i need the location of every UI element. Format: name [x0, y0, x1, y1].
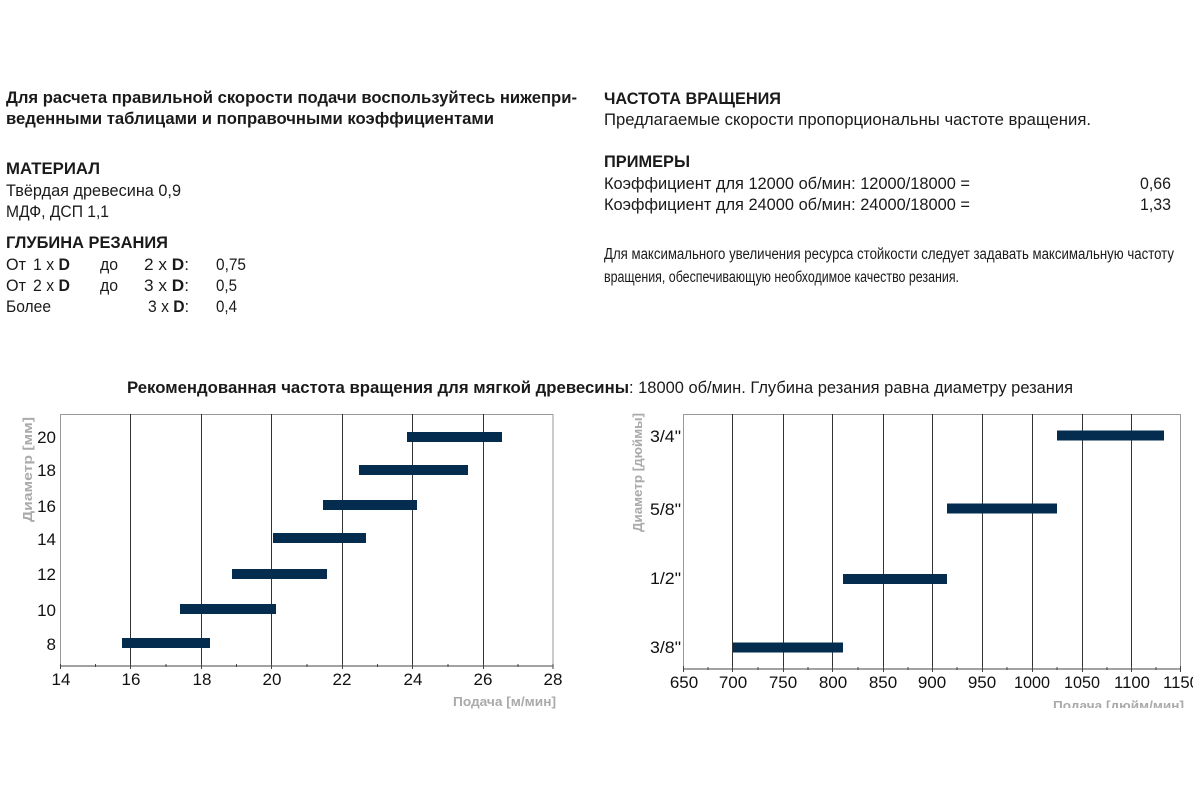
y axis labels: 1/2" [650, 569, 681, 588]
cutting depth table: 1 x D [33, 255, 70, 274]
examples rows: 1,33 [1140, 195, 1171, 214]
cutting depth table: 2 x D [33, 276, 70, 295]
material coefficients: Твёрдая древесина 0,9 [6, 181, 181, 200]
x axis labels: 16 [122, 670, 140, 689]
cutting depth table: 2 x D: [144, 255, 189, 274]
y axis labels: 3/4" [650, 427, 681, 446]
x axis [684, 666, 1180, 672]
x axis labels: 14 [52, 670, 70, 689]
rotation speed text: Предлагаемые скорости пропорциональны частоте вращения. [604, 110, 1091, 129]
cutting depth table: От [6, 255, 26, 274]
panel: examples [604, 152, 1171, 214]
heading: cutting depth: ГЛУБИНА РЕЗАНИЯ [6, 233, 168, 252]
examples rows [604, 174, 1171, 214]
cutting depth table: до [100, 255, 118, 274]
x axis labels: 28 [544, 670, 562, 689]
cutting depth table: От [6, 276, 26, 295]
x axis labels: 22 [333, 670, 351, 689]
y axis labels: 16 [37, 497, 56, 516]
heading: rotation speed: ЧАСТОТА ВРАЩЕНИЯ [604, 89, 781, 108]
bars [733, 430, 1164, 652]
examples rows: Коэффициент для 12000 об/мин: 12000/18000 = [604, 174, 970, 193]
intro text block [6, 88, 577, 128]
y axis labels: 20 [37, 428, 56, 447]
y axis labels: 18 [37, 461, 56, 480]
examples rows: 0,66 [1140, 174, 1171, 193]
x axis labels: 1150 [1163, 673, 1199, 692]
cutting depth table: 0,5 [216, 276, 237, 295]
x axis labels: 950 [968, 673, 996, 692]
x axis labels: 1050 [1064, 673, 1100, 692]
panel: material [6, 159, 181, 221]
heading: examples: ПРИМЕРЫ [604, 152, 690, 171]
charts title: Рекомендованная частота вращения для мягкой древесины [127, 378, 629, 397]
x axis [60, 664, 553, 669]
x axis labels [52, 670, 562, 689]
y axis title: Диаметр [дюймы] [630, 413, 645, 532]
note text [604, 246, 1174, 286]
panel: cutting depth [6, 233, 246, 316]
charts title [127, 378, 1073, 397]
y axis labels: 10 [37, 601, 56, 620]
cutting depth table: Более [6, 297, 51, 316]
intro text block: веденными таблицами и поправочными коэффициентами [6, 109, 494, 128]
x axis labels: 26 [474, 670, 492, 689]
material coefficients: МДФ, ДСП 1,1 [6, 202, 109, 221]
y axis labels [37, 428, 56, 654]
plot frame [684, 414, 1180, 669]
x axis labels: 750 [769, 673, 797, 692]
x axis labels: 1000 [1014, 673, 1050, 692]
y axis labels: 3/8" [650, 638, 681, 657]
y axis labels: 14 [37, 530, 56, 549]
x axis labels: 24 [404, 670, 422, 689]
cutting depth table: 0,4 [216, 297, 237, 316]
x axis labels [670, 676, 1193, 688]
plot frame [60, 414, 553, 666]
y axis title: Диаметр [мм] [20, 417, 35, 522]
x axis labels: 700 [719, 673, 747, 692]
x axis labels: 850 [869, 673, 897, 692]
examples rows: Коэффициент для 24000 об/мин: 24000/18000 = [604, 195, 970, 214]
cutting depth table: 3 x D: [144, 276, 189, 295]
charts title: : 18000 об/мин. Глубина резания равна диаметру резания [629, 378, 1073, 397]
y axis labels [650, 427, 681, 657]
x axis labels: 1100 [1114, 673, 1150, 692]
material coefficients [6, 181, 181, 221]
x axis labels: 900 [918, 673, 946, 692]
x axis labels: 650 [670, 673, 698, 692]
panel: rotation speed [604, 89, 1091, 129]
cutting depth table [6, 255, 246, 316]
x axis labels: 20 [263, 670, 281, 689]
x axis title: Подача [дюйм/мин] [1053, 698, 1184, 713]
cutting depth table: 3 x D: [148, 297, 189, 316]
y axis labels: 8 [47, 635, 56, 654]
x axis labels: 800 [819, 673, 847, 692]
cutting depth table: до [100, 276, 118, 295]
x axis labels: 18 [193, 670, 211, 689]
y axis labels: 5/8" [650, 500, 681, 519]
y axis labels: 12 [37, 565, 56, 584]
note text: вращения, обеспечивающую необходимое качество резания. [604, 269, 959, 286]
heading: material: МАТЕРИАЛ [6, 159, 100, 178]
x axis title: Подача [м/мин] [453, 694, 556, 709]
bars [122, 432, 502, 648]
chart: feed rate in m/min [20, 414, 562, 709]
cutting depth table: 0,75 [216, 255, 246, 274]
chart: feed rate in inch/min [630, 413, 1199, 713]
intro text block: Для расчета правильной скорости подачи воспользуйтесь нижепри- [6, 88, 577, 107]
